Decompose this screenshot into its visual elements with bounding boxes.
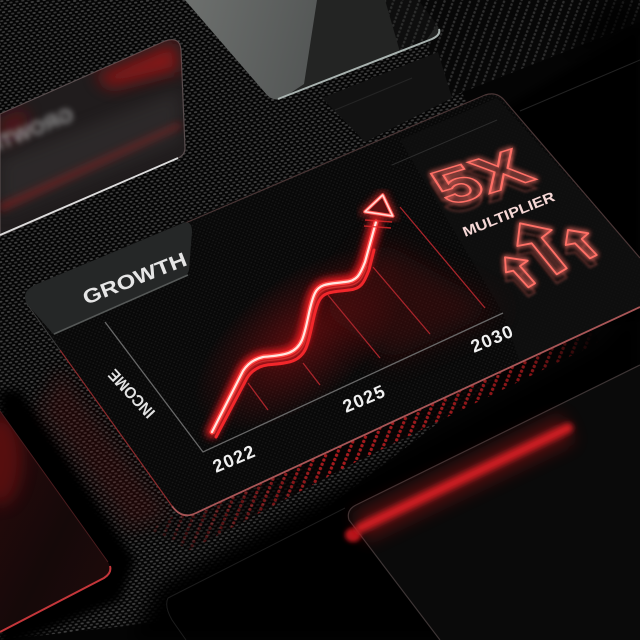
icon: three neon up arrows: [505, 223, 597, 287]
big neon 5X: 5X: [419, 139, 545, 216]
axes: [105, 313, 503, 452]
axis label: 2022: 2022: [210, 441, 259, 477]
growth heading tab: [25, 222, 192, 335]
arrowhead reflections: [364, 220, 392, 228]
arrowhead: [365, 195, 393, 216]
multiplier label: MULTIPLIER: [460, 188, 557, 240]
panel: main glass chart card: [25, 94, 640, 515]
heading text: GROWTH: [80, 249, 190, 310]
main line: [212, 222, 376, 432]
lower reflected line: [216, 250, 374, 437]
callout: 5X multiplier: [419, 139, 557, 240]
year drop lines: [248, 207, 485, 410]
red reflected weave under main panel: [154, 334, 591, 550]
large arrow: [517, 223, 567, 274]
chart haze: [163, 214, 500, 466]
chart: neon income growth line: [105, 195, 503, 466]
glass red reflections: [0, 42, 180, 215]
right section shading: [400, 98, 640, 362]
small left arrow: [505, 257, 535, 287]
panel: bottom-right glass card: [345, 365, 640, 640]
red neon reflection bar: [360, 428, 568, 528]
section divider: [392, 120, 497, 165]
line glow: [212, 222, 376, 432]
panel: top-left glass card: [0, 40, 185, 236]
panel outline: [183, 94, 640, 258]
small right arrow: [566, 230, 597, 258]
axis label: 2030: 2030: [468, 321, 517, 357]
red blob at card corner: [345, 528, 361, 542]
axis label: 2025: 2025: [340, 381, 389, 417]
glass bright lower edge: [0, 158, 178, 235]
card surface: [25, 94, 640, 515]
panel: top-centre glass card: [185, 0, 439, 99]
middle reflected line: [214, 266, 367, 434]
panel: bottom-left glass card: [0, 411, 110, 632]
axis label: income: INCOME: [105, 365, 159, 421]
panel: faint lower glass card: [167, 508, 345, 640]
